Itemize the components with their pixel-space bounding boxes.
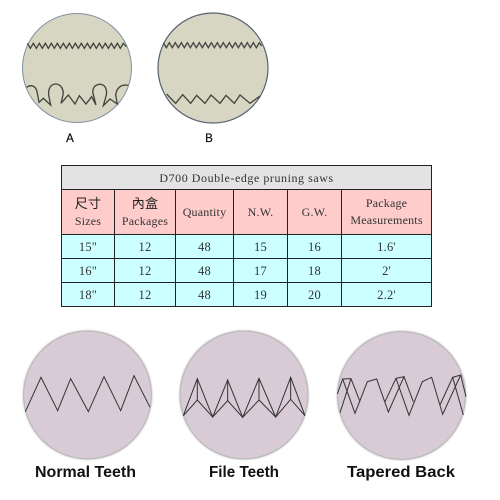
specification table: Package	[366, 196, 407, 210]
circle: file teeth	[180, 331, 308, 459]
specification table: 12	[139, 288, 151, 302]
circle: tapered back teeth	[337, 332, 466, 460]
specification table: N.W.	[248, 204, 273, 218]
specification table: 15	[254, 240, 267, 254]
circle: normal teeth	[24, 331, 152, 459]
specification table: 1.6'	[377, 240, 396, 254]
specification table: 18"	[79, 288, 97, 302]
specification table: G.W.	[302, 204, 327, 218]
specification table: 12	[139, 264, 151, 278]
caption: File Teeth: File Teeth	[209, 464, 279, 481]
specification table: 48	[198, 264, 211, 278]
specification table: 內盒	[132, 196, 158, 210]
specification table: 19	[254, 288, 267, 302]
label B: B	[205, 133, 213, 145]
specification table: Sizes	[75, 214, 101, 228]
specification table: 16"	[79, 264, 97, 278]
caption: Normal Teeth: Normal Teeth	[35, 464, 136, 481]
specification table: D700 Double-edge pruning saws	[159, 170, 334, 184]
specification table: 48	[198, 240, 211, 254]
specification table: 2.2'	[377, 288, 396, 302]
label A: A	[66, 133, 74, 145]
specification table: Quantity	[183, 204, 226, 218]
specification table: 17	[254, 264, 267, 278]
specification table: 20	[308, 288, 321, 302]
circle A: blade with gullet teeth	[22, 14, 132, 122]
specification table: Packages	[122, 214, 168, 228]
specification table: 18	[308, 264, 321, 278]
specification table: 12	[139, 240, 151, 254]
specification table: 2'	[382, 264, 391, 278]
specification table	[61, 165, 432, 307]
specification table: 16	[308, 240, 321, 254]
specification table: 15"	[79, 240, 97, 254]
caption: Tapered Back: Tapered Back	[347, 464, 455, 481]
specification table: Measurements	[350, 213, 423, 227]
circle B: blade with fine and coarse teeth	[158, 13, 268, 123]
specification table: 48	[198, 288, 211, 302]
specification table: 尺寸	[75, 196, 101, 210]
